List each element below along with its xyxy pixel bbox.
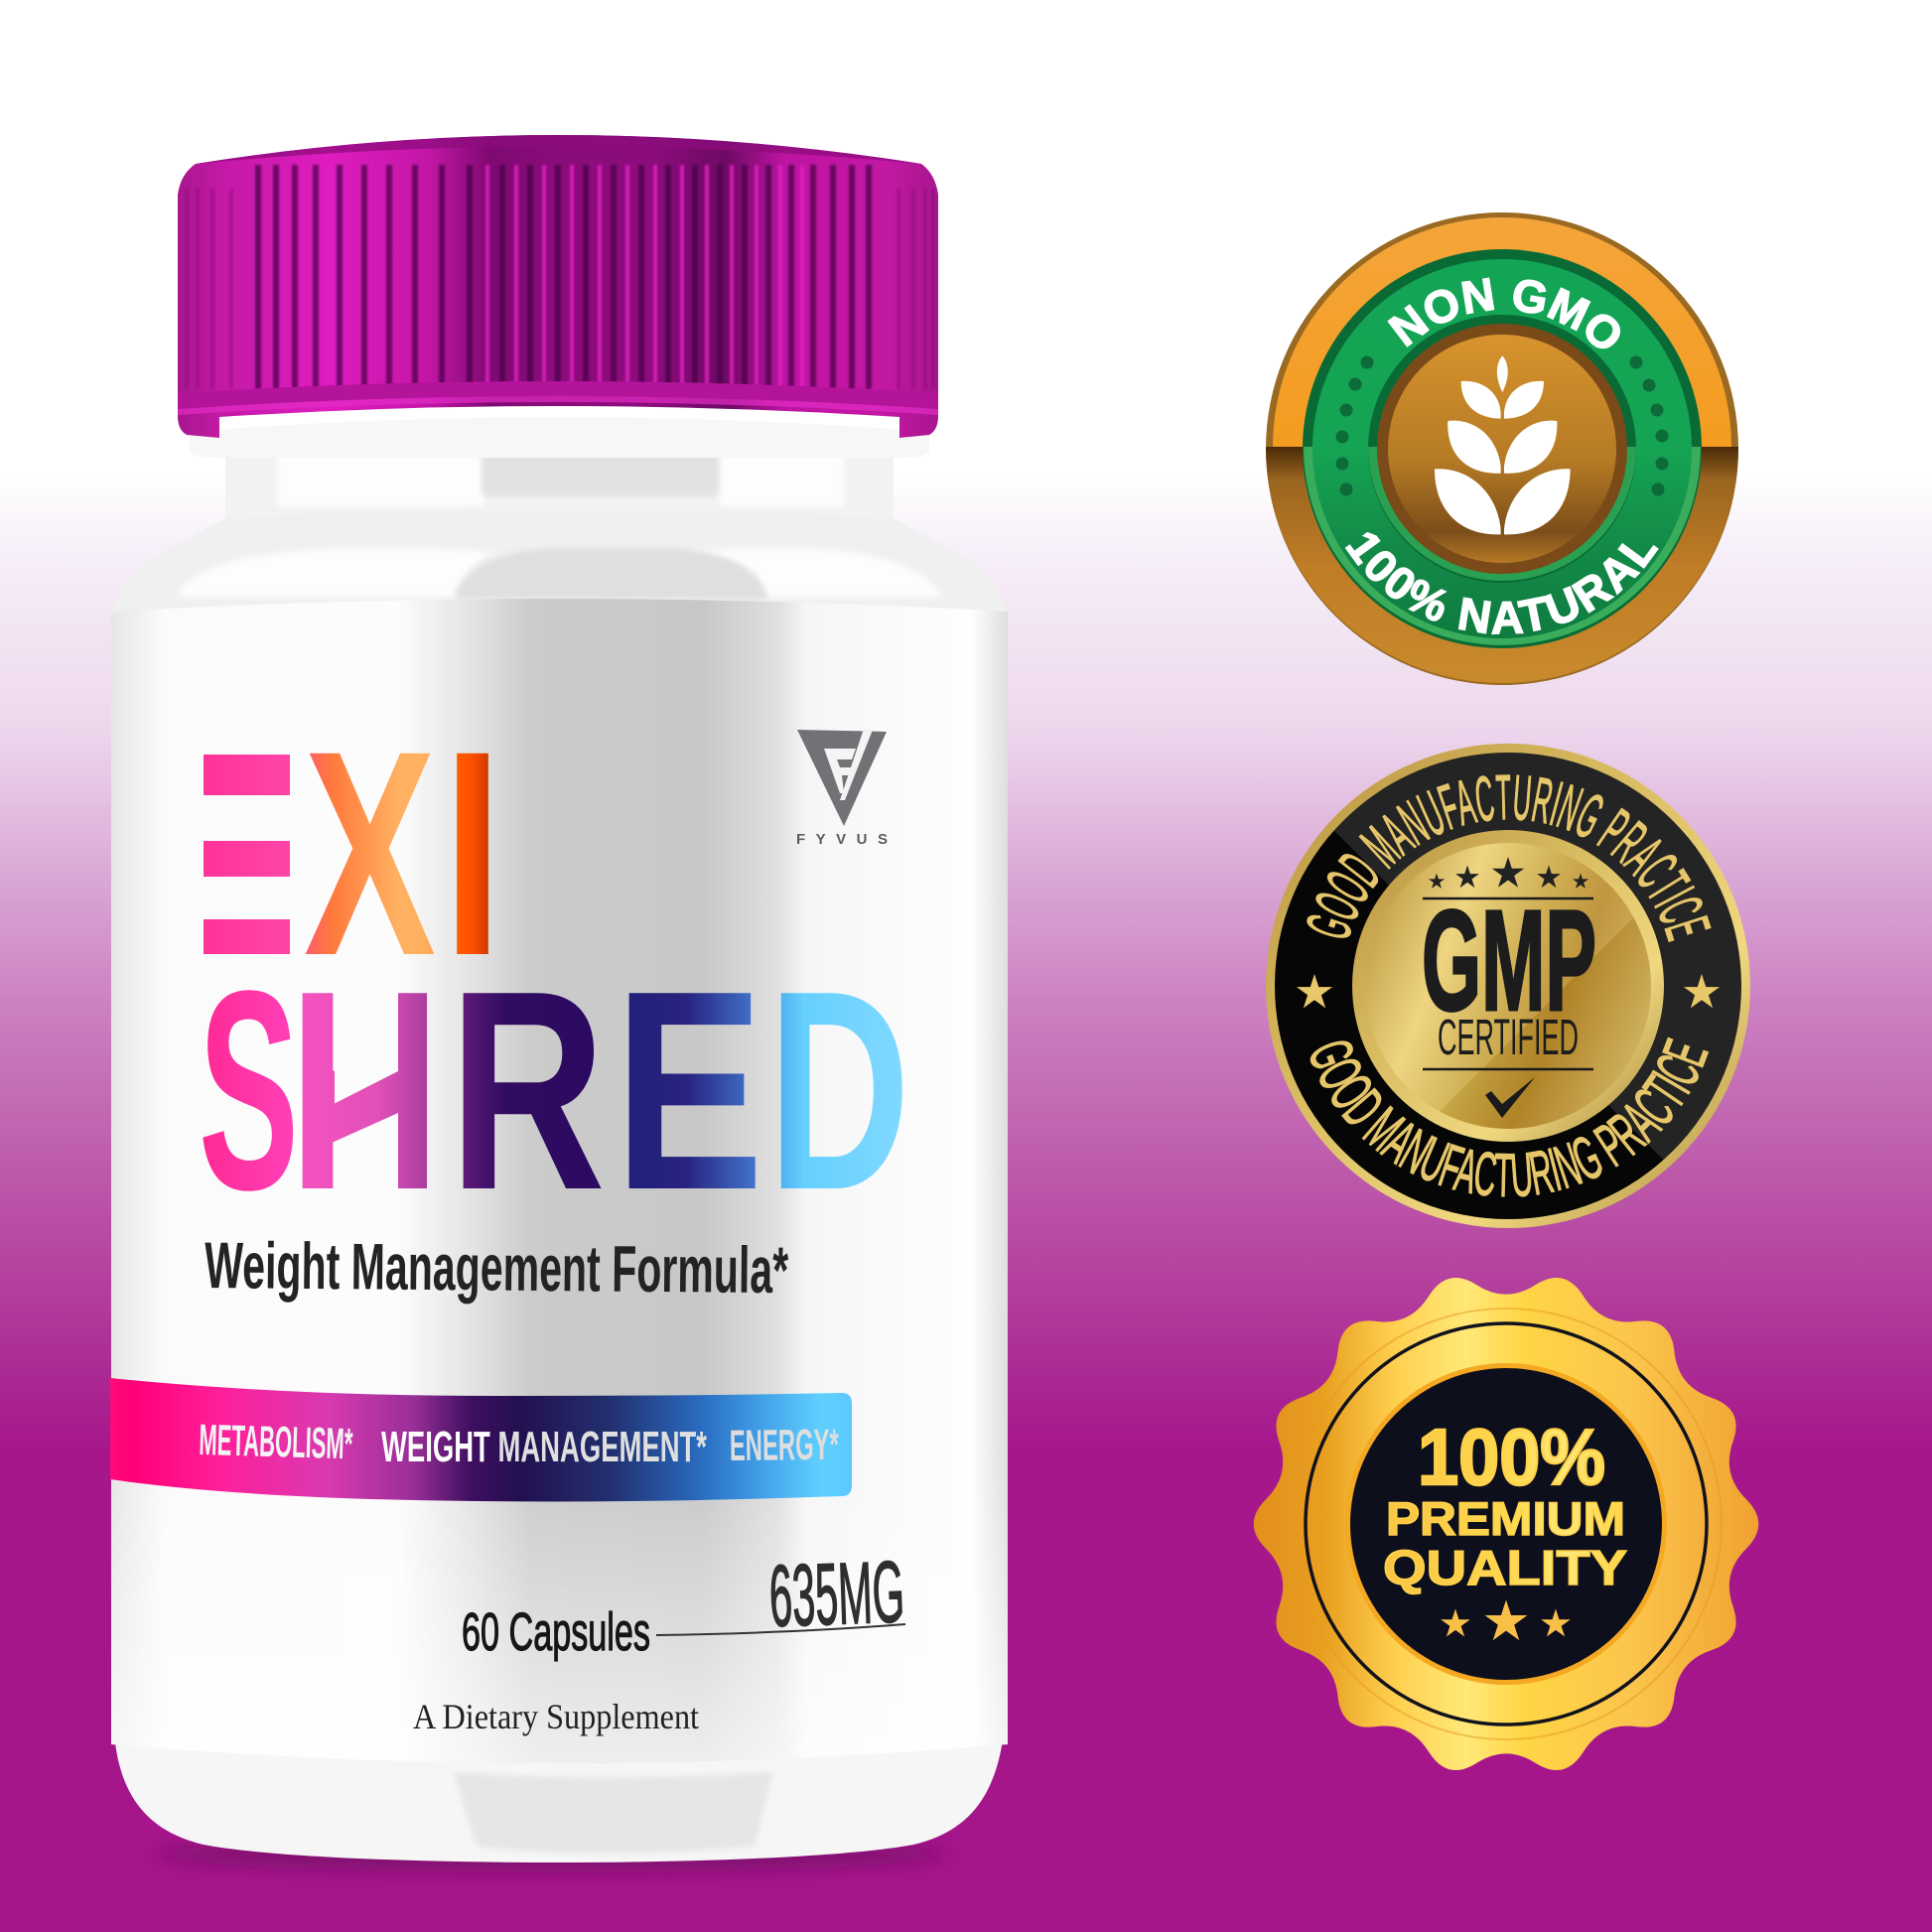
letter H with diagonal bar: H — [288, 931, 441, 1249]
divider rules — [1423, 898, 1593, 1069]
outer gold ring — [1266, 212, 1738, 685]
icon: FYVUS brand mark: FYVUS — [796, 831, 888, 848]
bottle ground shadow — [154, 1837, 948, 1872]
quality: QUALITY — [1383, 1542, 1627, 1595]
gold centre disc — [1352, 830, 1664, 1142]
icon: FYVUS brand mark — [796, 729, 888, 848]
letter H with diagonal bar — [302, 993, 427, 1188]
dark centre — [1350, 1368, 1662, 1680]
supplement note: A Dietary Supplement — [413, 1697, 699, 1736]
band text: weight management: WEIGHT MANAGEMENT* — [381, 1423, 708, 1471]
centre medallion — [1377, 324, 1627, 574]
text: 635MG — [767, 1542, 906, 1645]
ring stars — [1297, 974, 1720, 1008]
letter S: S — [199, 931, 299, 1249]
purple ribbed cap — [178, 135, 938, 438]
green ring dots — [1336, 355, 1668, 496]
scalloped gold seal — [1254, 1278, 1758, 1770]
letter X: X — [304, 691, 437, 1017]
gold rim — [1266, 744, 1750, 1228]
capsule rule — [656, 1624, 905, 1635]
bottle base — [114, 1732, 1004, 1863]
subtitle: weight management formula: Weight Management Formula* — [205, 1228, 789, 1307]
arc text: top: GOOD MANUFACTURING PRACTICE — [1307, 774, 1712, 943]
letter E — [204, 755, 290, 954]
bottle — [111, 135, 1008, 1872]
arc text: bottom: GOOD MANUFACTURING PRACTICE — [1311, 1036, 1710, 1197]
seal rings — [1291, 1309, 1722, 1739]
black ring — [1275, 753, 1741, 1219]
bottle label surface — [111, 599, 1008, 1763]
badge: GMP certified — [1266, 744, 1750, 1228]
band text: metabolism: METABOLISM* — [199, 1416, 353, 1468]
badge: 100% premium quality — [1254, 1278, 1758, 1770]
letter R: R — [449, 931, 606, 1249]
three stars — [1441, 1600, 1571, 1640]
icon: check mark — [1485, 1077, 1535, 1118]
bottle neck — [190, 417, 929, 531]
band text: energy: ENERGY* — [730, 1421, 840, 1470]
capsule count: 60 Capsules — [462, 1602, 650, 1662]
arc text: NON GMO: NON GMO — [1387, 278, 1620, 349]
icon: white wheat — [1435, 355, 1571, 534]
product logo: SHRED — [203, 990, 902, 1191]
gradient benefits band — [110, 1378, 852, 1501]
premium: PREMIUM — [1386, 1492, 1625, 1545]
letter E: E — [614, 931, 764, 1249]
green ring — [1303, 249, 1702, 648]
100 percent: 100% — [1418, 1413, 1605, 1501]
arc text: 100% NATURAL: 100% NATURAL — [1344, 532, 1659, 635]
bottle shoulder — [111, 510, 1008, 614]
letter E: E — [156, 691, 301, 1017]
five stars — [1429, 857, 1588, 889]
product logo: EXI — [204, 753, 488, 954]
badge: Non GMO 100% natural — [1266, 212, 1738, 685]
letter D: D — [768, 931, 910, 1249]
certified label: CERTIFIED — [1438, 1009, 1579, 1065]
GMP wordmark: GMP — [1422, 881, 1596, 1040]
letter I: I — [443, 691, 502, 1017]
